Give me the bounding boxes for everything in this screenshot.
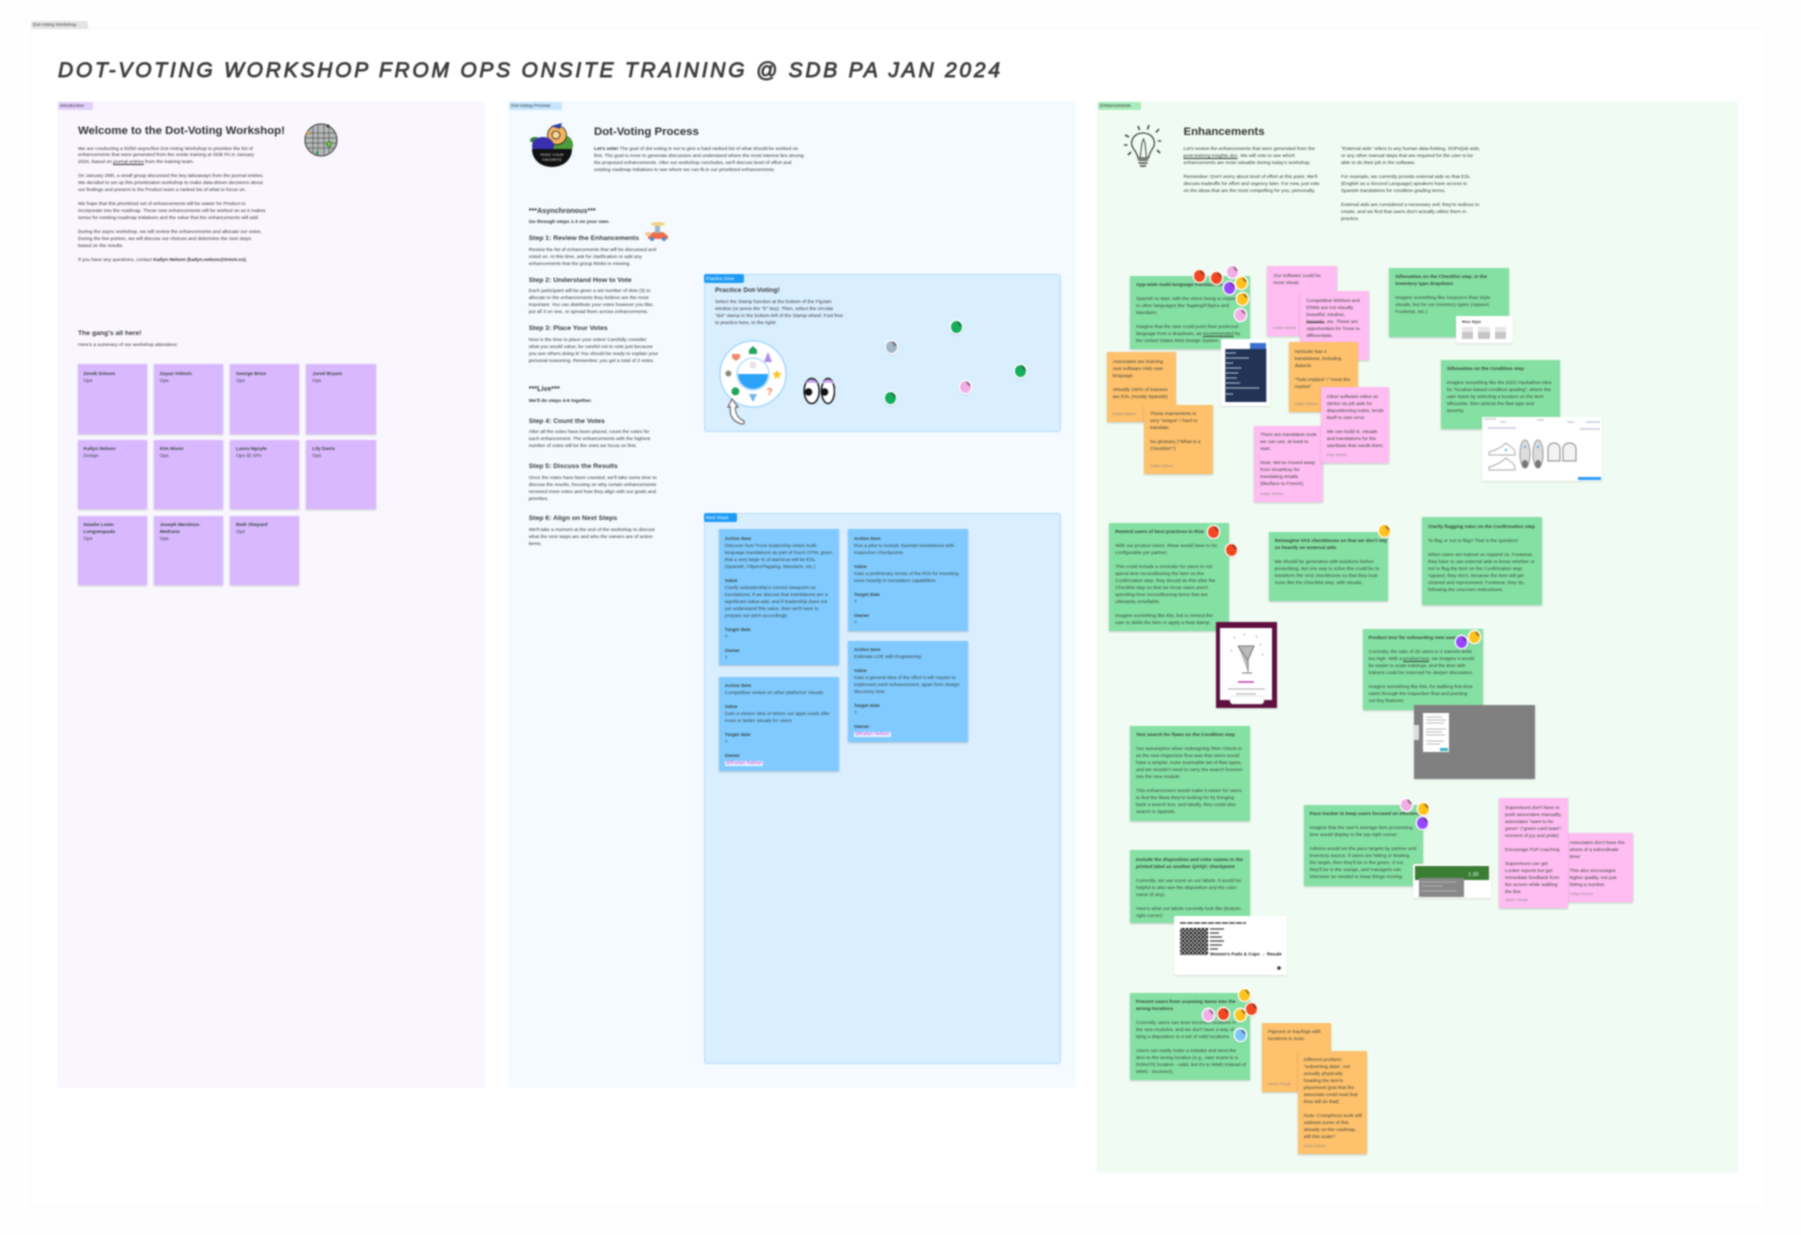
sticky: translation tools <box>1254 426 1323 502</box>
section tag: process: Dot-Voting Process <box>511 103 550 108</box>
sticky: attendee: Kailyn Nelson Design <box>84 447 116 459</box>
sticky: other software: Kaja Nelson <box>1327 453 1347 457</box>
sticky: attendee <box>306 364 376 434</box>
text: introduction body: We are conducting a 50/50 async/live Dot-Voting Workshop to prioritize the list of enhancements that were generated from the onsite training at SDB PA in January 2024, based on journal entries from the training team. On January 29th, a small group discussed the key takeaways from the journal entries. We decided to set up this prioritization workshop to make data-driven decisions about our findings and present to the Product team a ranked list of what to focus on. We hope that this prioritized set of enhancements will be easier for Product to incorporate into the roadmap. These new enhancements will be worked on as it makes sense for existing roadmap initiatives and the value that the enhancements will add. During the async workshop, we will review the enhancements and allocate our votes. During the live portion, we will discuss our choices and determine the next steps based on the results. If you have any questions, contact Kailyn Nelson (kailyn.nelson@trmnt.co). <box>78 146 266 263</box>
vote dot: red <box>1226 544 1236 556</box>
step 5 heading: Step 5: Discuss the Results <box>529 463 618 470</box>
image: printed label <box>1174 916 1287 975</box>
section tag: enhancements <box>1098 102 1141 110</box>
icon: stamp wheel: ? <box>767 387 773 398</box>
step 4 heading: Step 4: Count the Votes <box>529 418 605 425</box>
vote dot: green <box>950 321 962 333</box>
text: live note: We'll do steps 4-6 together. <box>529 398 592 404</box>
sticky: attendee <box>78 364 147 434</box>
sticky: action item pilot: Action Item Run a pilot to include Spanish translations with Inspection checkpoints Value Gain a preliminary sense of the ROI for investing more heavily in translation capabilities Target date ? Owner ? <box>854 537 958 626</box>
sticky: associates timer <box>1563 833 1633 902</box>
sticky: action item translations: Action Item Discover how Trove leadership views multi- language translations as part of DocS OTW, given that a very large % of warricoa will be ESL (Spanish, Filipino/Tagalog, Mandarin, etc.) Value Clarify uoleadership's current viewpoint on translations; if we discuss that translations are a significant value-add, and if leadership does not yet understand this value, then we'll have to prepare our pitch accordingly Target date ? Owner ? <box>725 537 832 661</box>
label with QR code <box>1179 921 1282 971</box>
panel: next steps <box>704 513 1061 1064</box>
sticky: associates timer: Associates don't have the stress of a subordinate timer This also encourages higher quality, not just hitting a number. <box>1570 841 1625 888</box>
section tag: enhancements: Enhancements <box>1100 103 1131 108</box>
sticky: attendee: Natalie Lowe- Longoespada Ops <box>84 523 115 542</box>
icon: bowl logo <box>529 122 574 168</box>
vote dot: yellow <box>1236 277 1247 289</box>
icon: light bulb <box>1123 124 1162 168</box>
sticky: associates learning: Kailyn Nelson <box>1113 412 1136 416</box>
image: language dropdown <box>1221 339 1270 406</box>
panel: enhancements <box>1097 101 1738 1173</box>
icon: eyes <box>802 376 836 406</box>
title: DOT-VOTING WORKSHOP FROM OPS ONSITE TRAINING @ SDB PA JAN 2024 <box>58 59 1000 82</box>
sticky: remind users: Remind users of best practices in Rize With our product vision, these would have to be configurable per partner. This could include a reminder for users to not spend time reconditioning the item on the Confirmation step; they should do this after the Checklist step so that we know users aren't spending time reconditioning items that are ultimately unsellable. Imagine something like this, but to remind the user to delist the item or apply a heat stamp: <box>1115 530 1217 626</box>
heading: practice: Practice Dot-Voting! <box>715 287 780 294</box>
vote dot: yellow <box>1236 293 1248 305</box>
heading: asynchronous: ***Asynchronous*** <box>529 206 596 215</box>
sticky: silhouettes on condition: Silhouettes on the Condition step Imagine something like the 2022 Hackathon idea for "location-based condition grading", where the user starts by selecting a location on the item silhouette, then selects the flaw type and severity. <box>1447 367 1551 414</box>
sticky: attendee <box>230 440 299 509</box>
sticky: clarify flagging <box>1422 517 1542 605</box>
sticky: associates learning <box>1107 352 1176 422</box>
vote dot: yellow <box>1468 631 1480 643</box>
sticky: attendee <box>306 440 376 509</box>
sticky: mannerisms: Kailyn Nelson <box>1150 464 1173 468</box>
step 2 heading: Step 2: Understand How to Vote <box>529 277 632 284</box>
step 6 heading: Step 6: Align on Next Steps <box>529 515 617 522</box>
sticky: netsuite: Kailyn Nelson <box>1295 402 1318 406</box>
sticky: more visual <box>1267 266 1337 336</box>
vote dot: yellow <box>1235 1009 1246 1021</box>
section tag: process <box>509 102 562 110</box>
sticky: multi-language translations: App-wide multi-language translations Spanish to start, with the vision being to expand to other languages like Tagalog/Filipino and Mandarin. Imagine that the user could point their preferred language from a dropdown, as recommended by the United States Web Design System. <box>1136 283 1240 344</box>
section tag: practice zone <box>704 274 744 283</box>
vote dot: pink <box>1226 266 1238 278</box>
sticky: more visual: Kailyn Nelson <box>1273 326 1297 330</box>
sticky: attendee: Kim Nixon Ops <box>160 447 184 459</box>
vote dot: red <box>1210 272 1222 284</box>
section tag: introduction <box>58 102 93 110</box>
sticky: attendee <box>230 516 299 585</box>
sticky: attendee: George Brize Ops <box>236 372 266 384</box>
vote dot: yellow <box>1238 989 1250 1001</box>
sticky: attendee: Zevek Dotson Ops <box>84 372 115 384</box>
sticky: attendee: Jared Bryant Ops <box>312 372 342 384</box>
sticky: netsuite: NetSuite has 4 translations, including dialects "Todo implant" / "meet the market" <box>1295 350 1350 390</box>
vote dot: yellow <box>1418 803 1429 815</box>
sticky: mannerisms <box>1144 405 1213 474</box>
sticky: supervisors <box>1499 798 1568 908</box>
tracker bar: 1:30 <box>1468 872 1478 878</box>
text: attendee summary: Here's a summary of our workshop attendees: <box>78 343 178 348</box>
vote dot: green <box>1014 365 1026 377</box>
sticky: clarify flagging: Clarify flagging rules on the Confirmation step To flag or not to flag? That is the question! When users are trained on Apparel vs. Footwear, they have to use external aids to know whether or not to flag the item on the Confirmation step. Apparel, they don't, because the item will get cleaned and reprocessed. Footwear, they do, following the onscreen instructions. <box>1428 525 1535 593</box>
text: external aids note: "External aids" refers to any human data-fretting, SOPs/job aids, or any other manual steps that are required for the user to be able to do their job in the software. For example, we currently provide external aids so that ESL (English as a Second Language) speakers have access to Spanish translations for condition grading terms. External aids are considered a necessary evil; they're tedious to create, and we find that users don't actually utilize them in practice. <box>1341 147 1480 222</box>
vote dot: red <box>1218 1008 1228 1020</box>
sticky: prevent scanning: Prevent users from scanning items into the wrong locations Currently, users can scan incorrect locations in the new modules, and we don't have a way of tying a disposition to a set of valid locations. Users can easily make a mistake and send the item to the wrong location (e.g., user scans to a DONATE location - valid, but it's to WMD instead of WMS - incorrect). <box>1136 1000 1246 1075</box>
sticky: supervisors: Supervisors don't have to push associates manually; associates "want to be green" ("green card team": moment of joy and pride) Encourage P2P coaching Supervisors can get Looker reports but get immediate feedback from the screen while walking the line. <box>1505 806 1562 895</box>
sticky: attendee <box>230 364 299 434</box>
step 1 text: Review the list of enhancements that will be discussed and voted on. At this time, ask for clarification or add any enhancements that the group thinks is missing. <box>529 248 656 267</box>
dropdown list <box>1224 342 1268 403</box>
sticky: action item competitive review: Action Item Competitive review on other platforms' visuals Value Gain a clearer idea of where our apps could offer more or better visuals for users Target date ? Owner @Evelyn Nathan <box>725 684 830 766</box>
rise style swatches <box>1461 319 1506 340</box>
sticky: include disposition: Include the disposition and color names in the printed label as another QA/QC checkpoint Currently, we use icons on our labels. It would be helpful to also see the disposition and the color name (if any). Here's what our labels currently look like (bottom- right corner): <box>1136 858 1243 919</box>
sticky: mannerisms: These mannerisms is very "unique" / hard to translate. No glossary ("What is a Checklist?") <box>1150 412 1200 452</box>
sticky: text search: Text search for flaws on the Condition step Our assumption when redesigning RMA Check-In as the new Inspection flow was that users would have a simpler, more scannable set of flaw types, and we wouldn't need to carry the search function into the new module. This enhancement would make it easier for users to find the flaws they're looking for by bringing back a search box, and ideally, they could also search in Spanish. <box>1136 733 1242 815</box>
sticky: different problem <box>1298 1051 1367 1154</box>
step 4 text: After all the votes have been placed, count the votes for each enhancement. The enhancements with the highest number of votes will be the ones we focus on first. <box>529 430 650 449</box>
step 5 text: Once the votes have been counted, we'll take some time to discuss the results, focusing on why certain enhancements received more votes and how they align with our goals and priorities. <box>529 476 657 502</box>
vote dot: pink <box>1400 799 1412 811</box>
sticky: attendee: Joseph Mendoza- Medrano Ops <box>160 523 200 542</box>
sticky: pace tracker: Pace tracker to keep users focused on efficiency Imagine that the user's average item processing time would display in the top-right corner. Admins would set the pace targets by partner and inventory source. If users are hitting or beating the target, then they'll be in the green. If not, they'll be in the orange, and managers can intervene as needed to keep things moving. <box>1310 812 1422 880</box>
text: async note: Go through steps 1-3 on your own. <box>529 220 610 225</box>
sticky: translation tools: Kailyn Nelson <box>1260 492 1284 496</box>
sticky: reimagine VAS <box>1269 532 1388 601</box>
step 3 heading: Step 3: Place Your Votes <box>529 325 608 332</box>
heading: process: Dot-Voting Process <box>594 126 699 138</box>
vote dot: pink <box>1235 309 1246 321</box>
text: enhancements intro: Let's review the enhancements that were generated from the post-training insights doc. We will vote to see which enhancements are most valuable during today's workshop. Remember: Don't worry about level of effort at this point. We'll discuss tradeoffs for effort and urgency later. For now, just vote on the ideas that are the most compelling for you, personally. <box>1184 147 1320 194</box>
icon: car illustration <box>644 221 669 242</box>
sticky: attendee: Zayan Vidovic Ops <box>160 372 192 384</box>
vote dot: purple <box>1224 282 1235 294</box>
step 3 text: Now is the time to place your votes! Carefully consider what you would value; be careful not to vote just because you see others doing it! You should be ready to explain your personal reasoning. Remember, you get a total of 3 votes. <box>529 338 658 364</box>
image: pace tracker screenshot <box>1412 864 1491 898</box>
vote dot: green <box>885 392 896 404</box>
icon: disco ball <box>304 122 338 158</box>
image: rise style <box>1456 316 1512 343</box>
sticky: attendee <box>78 440 147 509</box>
sticky: associates timer: Kailyn Nelson <box>1570 892 1593 896</box>
sticky: pigeons <box>1262 1023 1331 1092</box>
icon: curved arrow <box>726 398 746 426</box>
section tag: introduction: Introduction <box>60 103 84 108</box>
sticky: reimagine VAS: Reimagine VAS checkboxes so that we don't rely so heavily on external aids We should be generative with solutions before prescribing, but one way to solve this could be to transform the VAS checkboxes so that they look more like the Checklist step, with visuals. <box>1275 539 1387 586</box>
vote dot: red <box>1194 270 1205 282</box>
vote dot: blue <box>1235 1029 1246 1041</box>
heading: welcome: Welcome to the Dot-Voting Workshop! <box>78 125 285 137</box>
vote dot: yellow <box>1379 525 1390 537</box>
sticky: netsuite <box>1289 342 1358 412</box>
icon: bowl logo: FEED YOUR <box>540 152 564 157</box>
sticky: silhouettes on checklist <box>1389 268 1509 337</box>
section tag: next steps: Next Steps <box>706 515 728 520</box>
panel: practice zone <box>704 274 1061 432</box>
sticky: attendee <box>154 516 223 585</box>
card with glass <box>1218 626 1274 706</box>
vote dot: grey <box>886 341 896 353</box>
sticky: competitive note: Competitive WMSes and ERMs are not visually beautiful, intuitive, fantastic, etc. These are opportunities for Trove to differentiate. <box>1306 299 1360 339</box>
vote dot: red <box>1208 526 1219 538</box>
sticky: attendee: Beth Shepard Ops <box>236 523 268 535</box>
sticky: attendee <box>78 516 147 585</box>
label with QR code: Women's Pads & Cups → Resale <box>1210 952 1282 956</box>
image: product tour screenshot <box>1414 705 1535 779</box>
board label <box>31 20 88 28</box>
step 1 heading: Step 1: Review the Enhancements <box>529 235 639 242</box>
sticky: different problem: Different problem: "subverting data", not actually physically heading the item's placement (just that the associate could read that they will do that) Note: Crumpheon work will address some of this already on the roadmap, still this scale? <box>1304 1058 1362 1140</box>
vote dot: pink <box>960 381 970 393</box>
heading: live: ***Live*** <box>529 384 560 393</box>
rise style swatches: Rise Style <box>1462 319 1481 324</box>
sticky: different problem: Kayla Nelson <box>1304 1144 1326 1148</box>
sticky: product tour: Product tour for onboarding new users Currently, the ratio of 25 users to 2 trainers feels too high. With a product tour, we imagine it would be easier to scale trainings, and the time with trainers could be reserved for deeper discussion. Imagine something like this, for walking first-time users through the Inspection flow and pointing out key features: <box>1368 636 1474 704</box>
section tag: next steps <box>704 513 737 522</box>
image: celebration card <box>1216 622 1277 708</box>
icon: stamp wheel <box>718 340 788 408</box>
step 2 text: Each participant will be given a set number of dots (3) to allocate to the enhancements they believe are the most important. You can distribute your votes however you like; put all 3 on one, or spread them across enhancements. <box>529 289 653 315</box>
text: practice instructions: Select the Stamp function at the bottom of the FigJam window (or press the "E" key). Then, select the circular "dot" stamp in the bottom-left of the Stamp wheel. Feel free to practice here, to the right! <box>715 300 843 326</box>
sticky: silhouettes on checklist: Silhouettes on the Checklist step, in the Inventory type dropdown Imagine something like Amazon's Rise Style visuals, but for our inventory types (Apparel, Footwear, etc.) <box>1395 275 1490 315</box>
sticky: other software <box>1321 387 1389 463</box>
sticky: attendee: Lily Davis Ops <box>312 447 335 459</box>
tour dialog <box>1413 712 1450 753</box>
image: shoe silhouettes <box>1482 417 1602 481</box>
icon: bowl logo: FAVORITE <box>542 157 562 162</box>
step 6 text: We'll take a moment at the end of the workshop to discuss what the next steps are and who the owners are of action items. <box>529 528 655 547</box>
sticky: silhouettes on condition <box>1441 360 1560 429</box>
sticky: associates learning: Associates are learning new software AND new language. Virtually 100% of trainees are ESL (mostly Spanish). <box>1113 360 1169 400</box>
sticky: attendee <box>154 440 223 509</box>
section tag: practice zone: Practice Zone <box>706 276 734 281</box>
sticky: pigeons: Javier Ortega <box>1268 1082 1291 1086</box>
sticky: pigeons: Pigeons or tray/legs with locations to scan. <box>1268 1030 1321 1042</box>
vote dot: pink <box>1202 1009 1214 1021</box>
shoes diagram <box>1484 418 1602 481</box>
sticky: competitive note <box>1300 291 1369 360</box>
sticky: action item estimate: Action Item Estimate LOE with Engineering Value Gain a general idea of the effort it will require to implement each enhancement, apart from design discovery time Target date ? Owner @Kailyn Nelson <box>854 648 959 737</box>
panel: dot-voting process <box>508 101 1076 1088</box>
vote dot: red <box>1246 1003 1256 1015</box>
vote dot: purple <box>1417 817 1428 829</box>
sticky: other software: Other software relies on sticker as job aids for dispositioning notes, lends itself to user error We can build in, visuals and translations for the userbase that needs them. <box>1327 395 1384 449</box>
board label: Dot-Voting Workshop <box>33 22 76 26</box>
tracker bar <box>1414 865 1490 898</box>
vote dot: purple <box>1456 636 1467 648</box>
sticky: translation tools: There are translation tools we can use, at least to start. Note: We've moved away from SmartKey for translating emails (like/face to French). <box>1260 433 1317 487</box>
sticky: more visual: Our software could be more visual. <box>1273 274 1321 286</box>
text: process intro: Let's vote! The goal of dot-voting is not to give a hard ranked list of what should be worked on first. The goal is more to generate discussion and understand where the most interest lies among the proposed enhancements. After our workshop concludes, we'll discuss level of effort and existing roadmap initiatives to see where we can fit in our prioritized enhancements. <box>594 147 804 173</box>
sticky: attendee <box>154 364 223 434</box>
heading: the gang: The gang's all here! <box>78 330 142 337</box>
sticky: attendee: Laura Ngoyle Ops @ SPA <box>236 447 267 459</box>
sticky: supervisors: Javier Ortega <box>1505 898 1528 902</box>
heading: enhancements: Enhancements <box>1184 126 1265 138</box>
panel: introduction <box>57 101 485 1088</box>
